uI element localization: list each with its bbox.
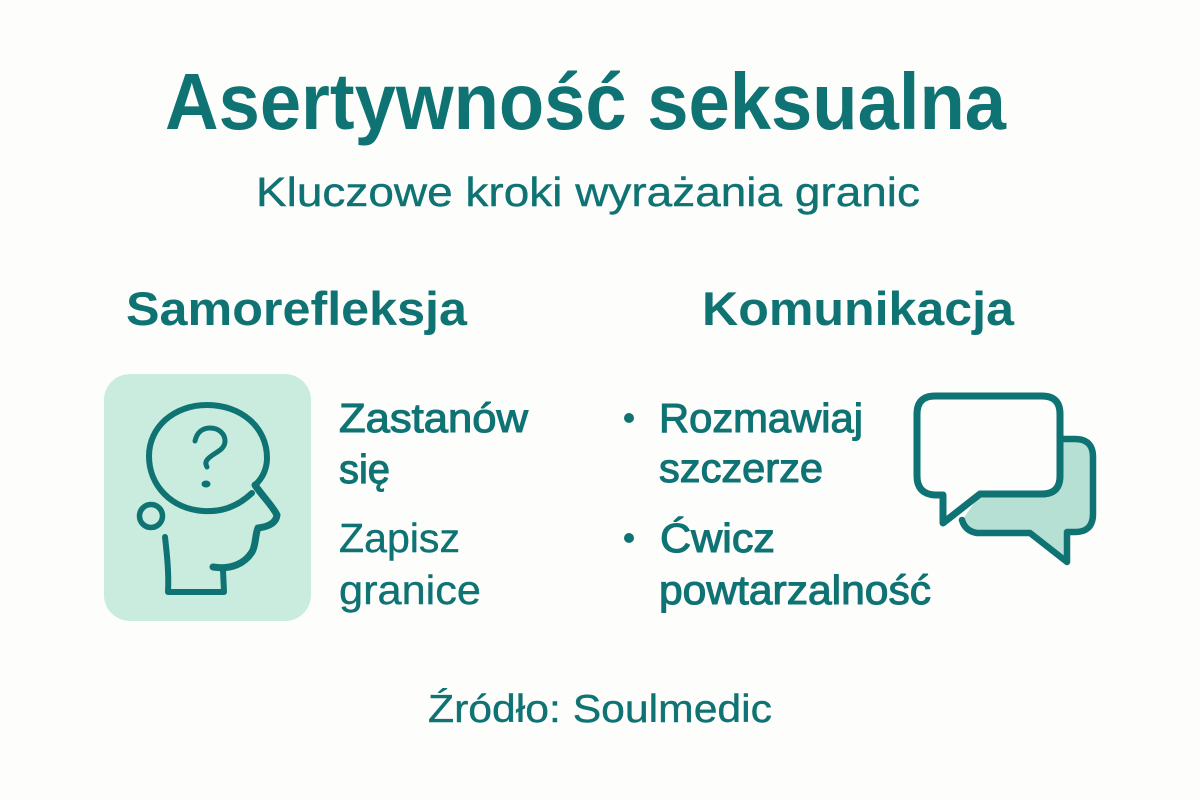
list: Samorefleksja items: [339, 395, 528, 613]
list: Komunikacja items: [624, 395, 931, 613]
subtitle: Kluczowe kroki wyrażania granic: [256, 169, 920, 215]
heading: Samorefleksja: Samorefleksja: [126, 282, 468, 335]
icon: speech bubbles: [917, 396, 1093, 562]
list: Komunikacja items: Rozmawiaj: [659, 395, 863, 441]
title: Asertywność seksualna: [165, 57, 1006, 146]
list: Samorefleksja items: granice: [339, 567, 481, 613]
icon: head with question mark: [104, 374, 311, 621]
list: Samorefleksja items: się: [339, 446, 390, 492]
list: Samorefleksja items: Zapisz: [339, 515, 460, 561]
list: Samorefleksja items: Zastanów: [339, 395, 528, 441]
list: Komunikacja items: Ćwicz: [660, 515, 775, 561]
heading: Komunikacja: Komunikacja: [702, 282, 1015, 335]
source: Źródło: Soulmedic: [428, 688, 772, 731]
list: Komunikacja items: powtarzalność: [659, 567, 931, 613]
list: Komunikacja items: szczerze: [659, 445, 823, 491]
